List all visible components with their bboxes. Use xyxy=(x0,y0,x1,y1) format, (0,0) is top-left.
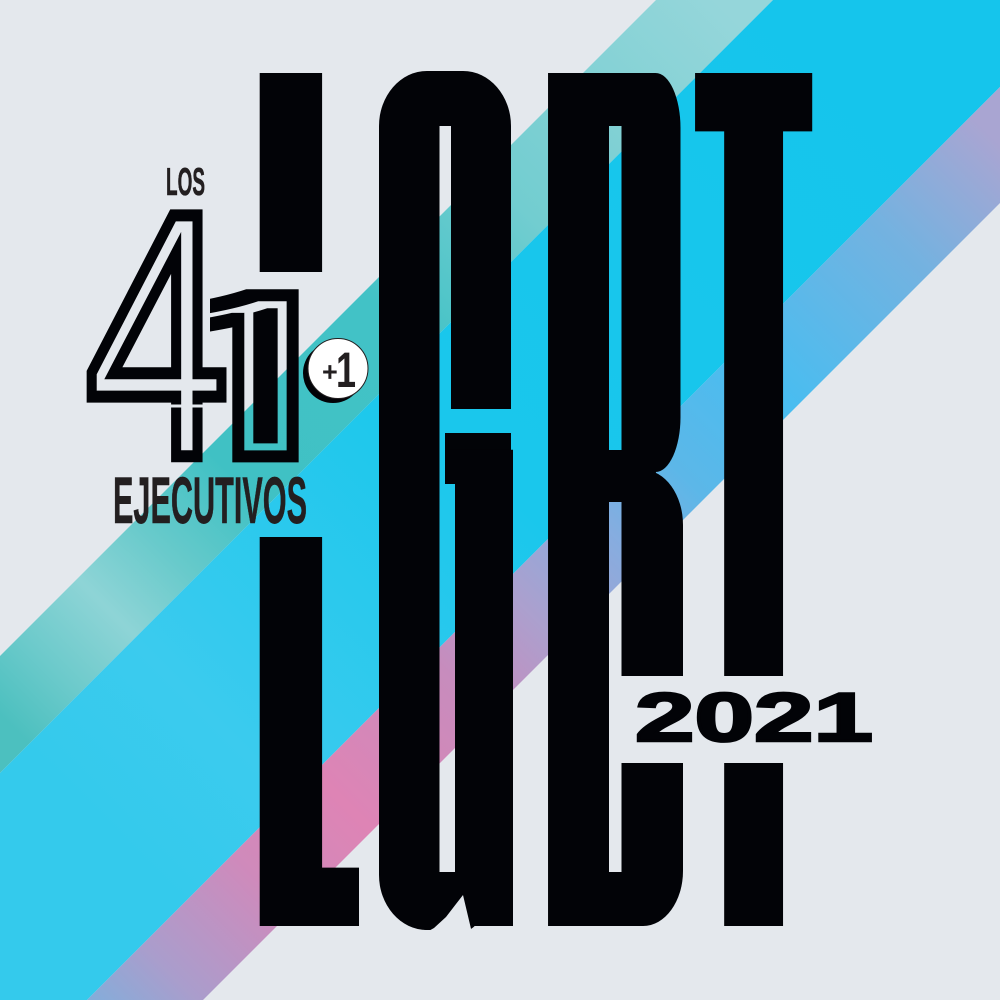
numeral 4: 4 xyxy=(84,172,229,516)
letter G bottom notch xyxy=(425,895,472,933)
text: LOS xyxy=(166,161,205,204)
badge: +1: 1 xyxy=(336,342,356,398)
numeral 41 xyxy=(86,209,299,462)
text: EJECUTIVOS xyxy=(113,463,307,537)
numeral 1: 1 xyxy=(90,266,422,496)
title: LGBT xyxy=(277,0,794,1000)
badge: +1 xyxy=(303,338,368,403)
badge: +1: + xyxy=(322,357,338,387)
year: 2021: 2021 xyxy=(635,679,873,756)
